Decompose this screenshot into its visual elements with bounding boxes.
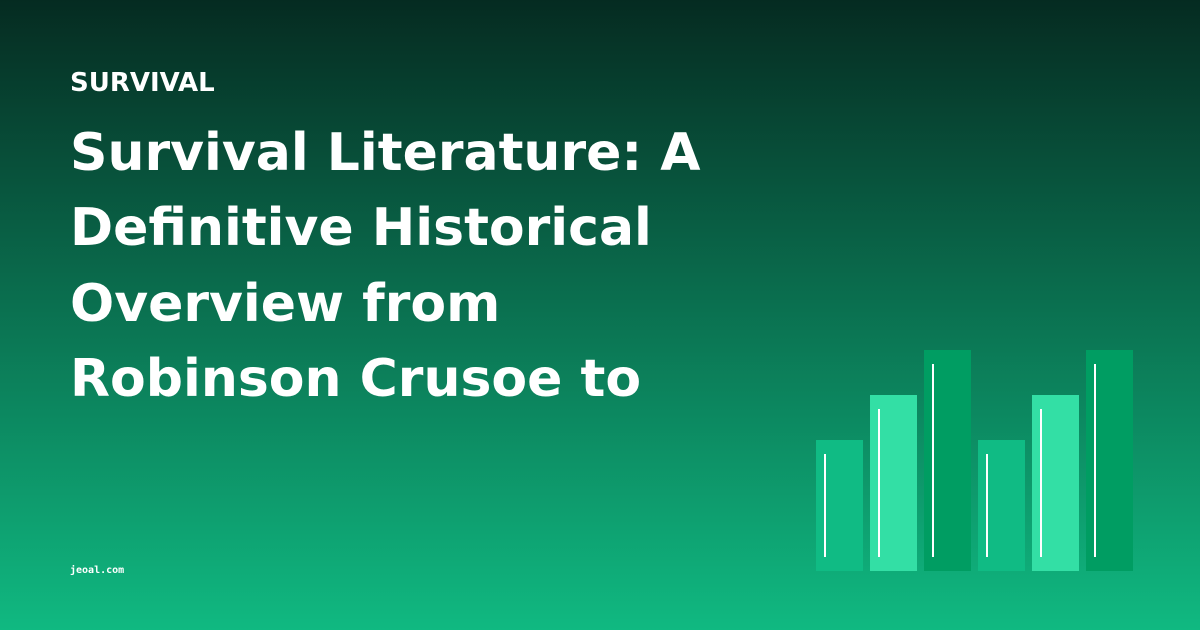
site credit: jeoal.com [70,565,124,576]
title: Survival Literature: A [70,123,700,183]
title: Robinson Crusoe to [70,349,641,409]
title [70,123,700,409]
bar 1 [816,440,863,571]
bar 5 [1032,395,1079,571]
title: Definitive Historical [70,198,652,258]
bar 6 [1086,350,1133,571]
bar 2 [870,395,917,571]
bar 3 [924,350,971,571]
category label: SURVIVAL [70,68,215,98]
bar 4 [978,440,1025,571]
title: Overview from [70,274,500,334]
